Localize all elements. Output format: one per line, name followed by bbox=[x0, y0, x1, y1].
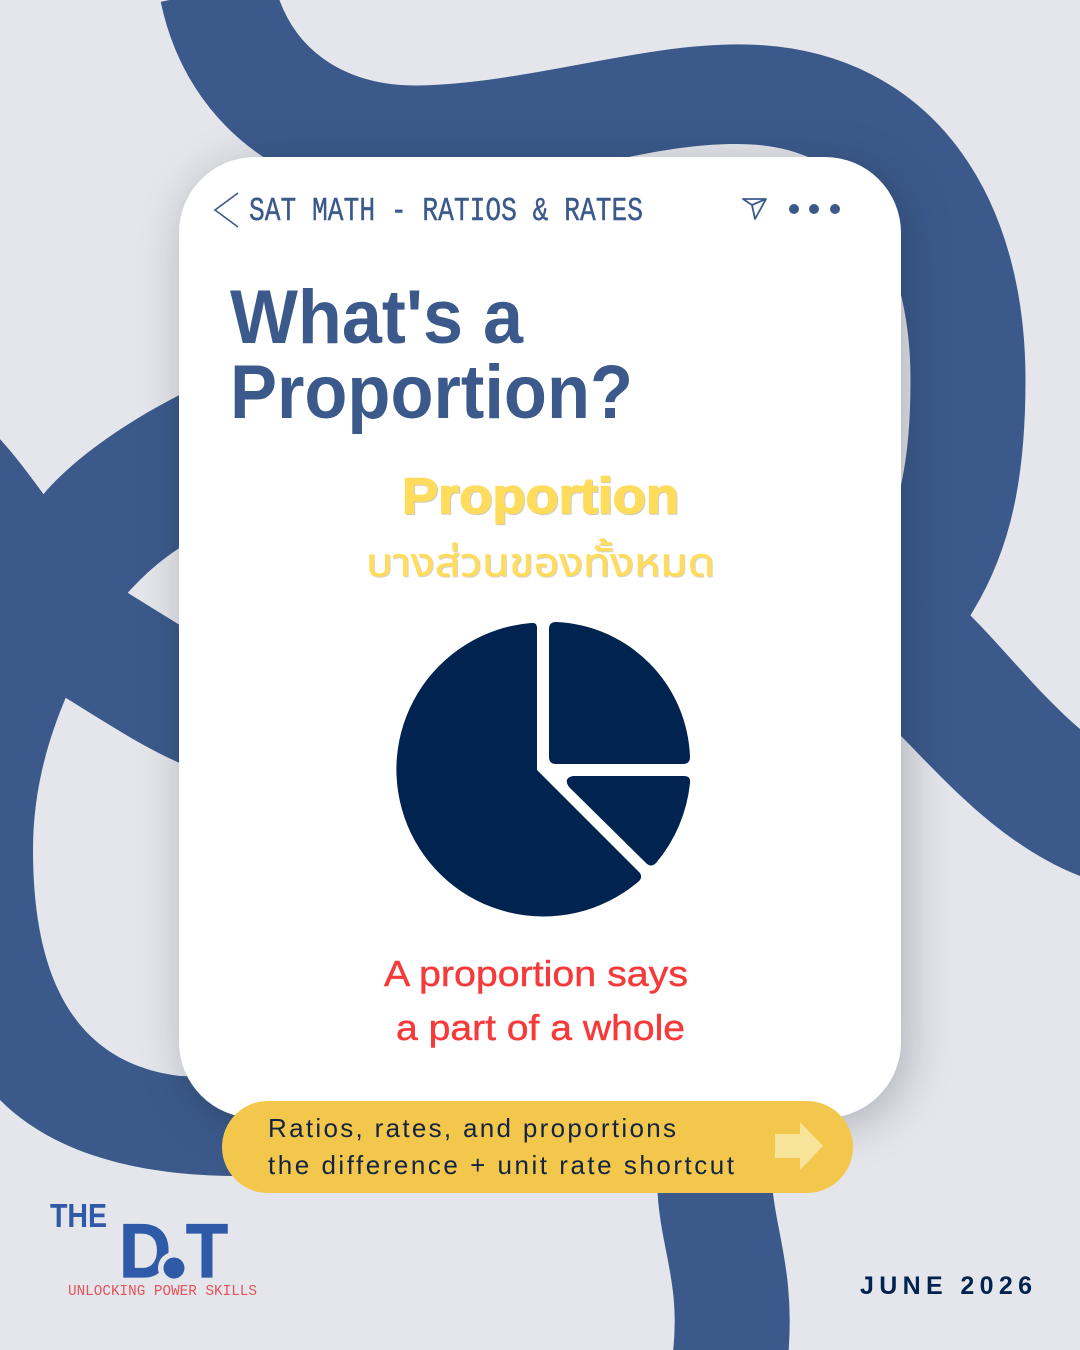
logo: D bbox=[119, 1209, 171, 1294]
callout text bbox=[268, 1113, 735, 1180]
title: Proportion? bbox=[230, 350, 633, 435]
logo: THE bbox=[50, 1197, 107, 1234]
icon: send bbox=[743, 199, 766, 219]
subheading: Proportion: Proportion bbox=[402, 468, 679, 524]
caption: A proportion says bbox=[384, 953, 688, 994]
date: JUNE 2026 bbox=[860, 1272, 1032, 1300]
icon: arrow bbox=[775, 1122, 823, 1170]
callout pill bbox=[222, 1101, 853, 1193]
logo: UNLOCKING POWER SKILLS bbox=[68, 1283, 257, 1300]
icon: back arrow bbox=[215, 193, 238, 227]
chart: pie bbox=[396, 622, 690, 916]
icon: more dots bbox=[789, 204, 840, 214]
subheading: Thai: บางส่วนของทั้งหมด bbox=[366, 535, 715, 594]
callout text: Ratios, rates, and proportions bbox=[268, 1113, 676, 1143]
caption bbox=[384, 953, 688, 1048]
header label: SAT MATH - RATIOS & RATES bbox=[249, 193, 643, 230]
title: What's a bbox=[230, 275, 524, 360]
caption: a part of a whole bbox=[396, 1007, 685, 1048]
title bbox=[230, 275, 633, 435]
logo: T bbox=[186, 1209, 228, 1294]
logo bbox=[50, 1197, 257, 1300]
panel: main card bbox=[179, 157, 901, 1118]
callout text: the difference + unit rate shortcut bbox=[268, 1150, 735, 1180]
